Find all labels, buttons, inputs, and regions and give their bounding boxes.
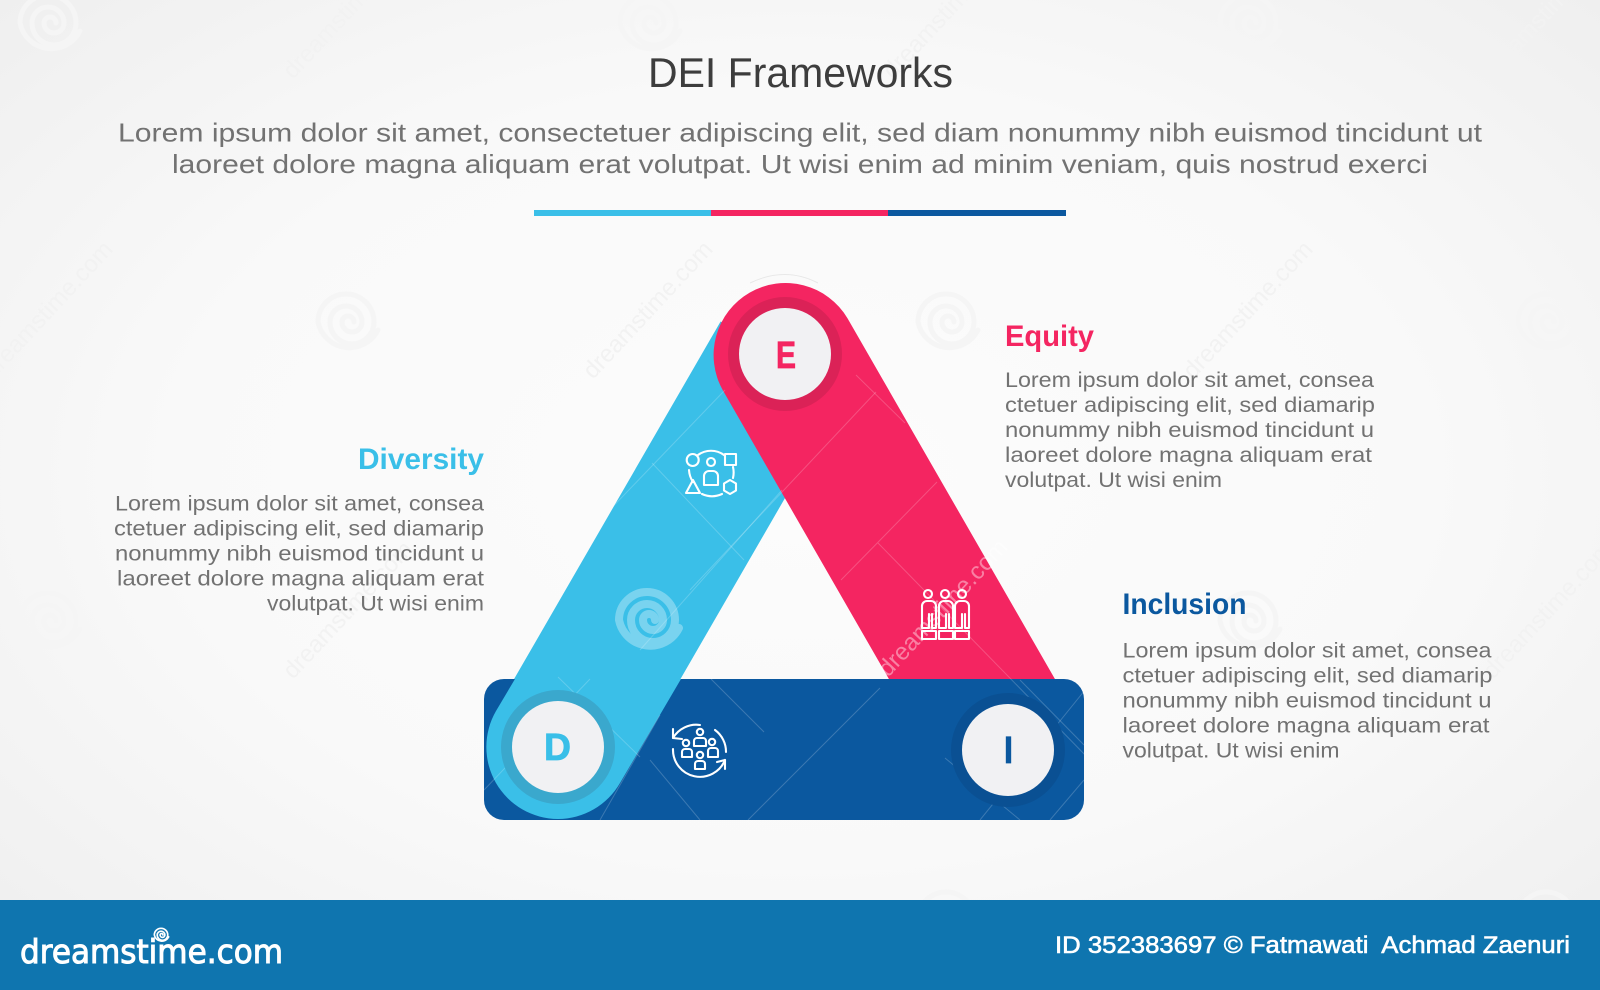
body: diversity <box>114 492 484 616</box>
band: inclusion <box>484 679 1084 820</box>
body: diversity: laoreet dolore magna aliquam erat <box>117 568 484 590</box>
heading: inclusion: Inclusion <box>1122 588 1246 621</box>
body: diversity: ctetuer adipiscing elit, sed diamarip <box>114 518 484 540</box>
watermark pattern: dreamstime.com <box>1178 236 1318 384</box>
body: equity: nonummy nibh euismod tincidunt u <box>1005 419 1374 442</box>
icon: equity three people on boxes <box>922 590 969 639</box>
text block: diversity <box>114 443 484 616</box>
body: inclusion <box>1122 640 1492 762</box>
circle: E: E <box>776 335 796 377</box>
icon: diversity shapes and person <box>686 451 736 496</box>
circle: D: D <box>544 727 571 769</box>
band: equity <box>714 283 1067 700</box>
circle: D <box>501 690 615 804</box>
triangle diagram <box>484 274 1084 820</box>
body: equity: ctetuer adipiscing elit, sed diamarip <box>1005 394 1375 417</box>
heading: equity: Equity <box>1005 320 1094 353</box>
circle: I <box>951 693 1065 807</box>
title: DEI Frameworks <box>648 49 953 96</box>
icon: watermark swirl on diversity band <box>619 592 679 646</box>
tricolor divider <box>534 210 1066 216</box>
watermark pattern: dreamstime.com <box>578 236 718 384</box>
body: diversity: volutpat. Ut wisi enim <box>267 592 484 616</box>
footer credit: ID 352383697 © Fatmawati Achmad Zaenuri <box>1055 932 1570 959</box>
subtitle text: Lorem ipsum dolor sit amet, consectetuer adipiscing elit, sed diam nonummy nibh euismod tincidunt ut <box>118 118 1483 148</box>
body: inclusion: nonummy nibh euismod tincidunt u <box>1122 690 1492 712</box>
footer bar <box>0 900 1600 990</box>
body: equity <box>1005 369 1375 492</box>
icon: inclusion people in cycle <box>673 725 726 777</box>
subtitle text: laoreet dolore magna aliquam erat volutpat. Ut wisi enim ad minim veniam, quis nostrud exerci <box>172 149 1428 179</box>
faint arc above E <box>750 274 818 283</box>
body: diversity: nonummy nibh euismod tincidunt u <box>115 542 484 566</box>
band: diversity <box>486 322 847 819</box>
text block: inclusion <box>1122 588 1492 762</box>
body: inclusion: volutpat. Ut wisi enim <box>1122 740 1340 762</box>
watermark pattern: dreamstime.com <box>278 536 418 684</box>
text block: equity <box>1005 320 1375 492</box>
lattice watermark over bands <box>484 375 1090 820</box>
subtitle text <box>118 118 1483 179</box>
circle: I: I <box>1004 730 1013 772</box>
watermark text on equity band: dreamstime.com <box>873 534 1013 682</box>
footer logo: dreamstime.com <box>20 932 283 971</box>
body: diversity: Lorem ipsum dolor sit amet, consea <box>115 492 484 516</box>
heading: diversity: Diversity <box>358 443 484 476</box>
body: inclusion: Lorem ipsum dolor sit amet, consea <box>1122 640 1492 662</box>
body: equity: Lorem ipsum dolor sit amet, consea <box>1005 369 1374 392</box>
band: diversity lower overlap <box>486 679 681 819</box>
body: equity: laoreet dolore magna aliquam erat <box>1005 444 1372 467</box>
body: inclusion: laoreet dolore magna aliquam erat <box>1122 714 1490 738</box>
circle: E <box>728 297 842 411</box>
body: inclusion: ctetuer adipiscing elit, sed diamarip <box>1122 664 1492 688</box>
body: equity: volutpat. Ut wisi enim <box>1005 469 1222 492</box>
